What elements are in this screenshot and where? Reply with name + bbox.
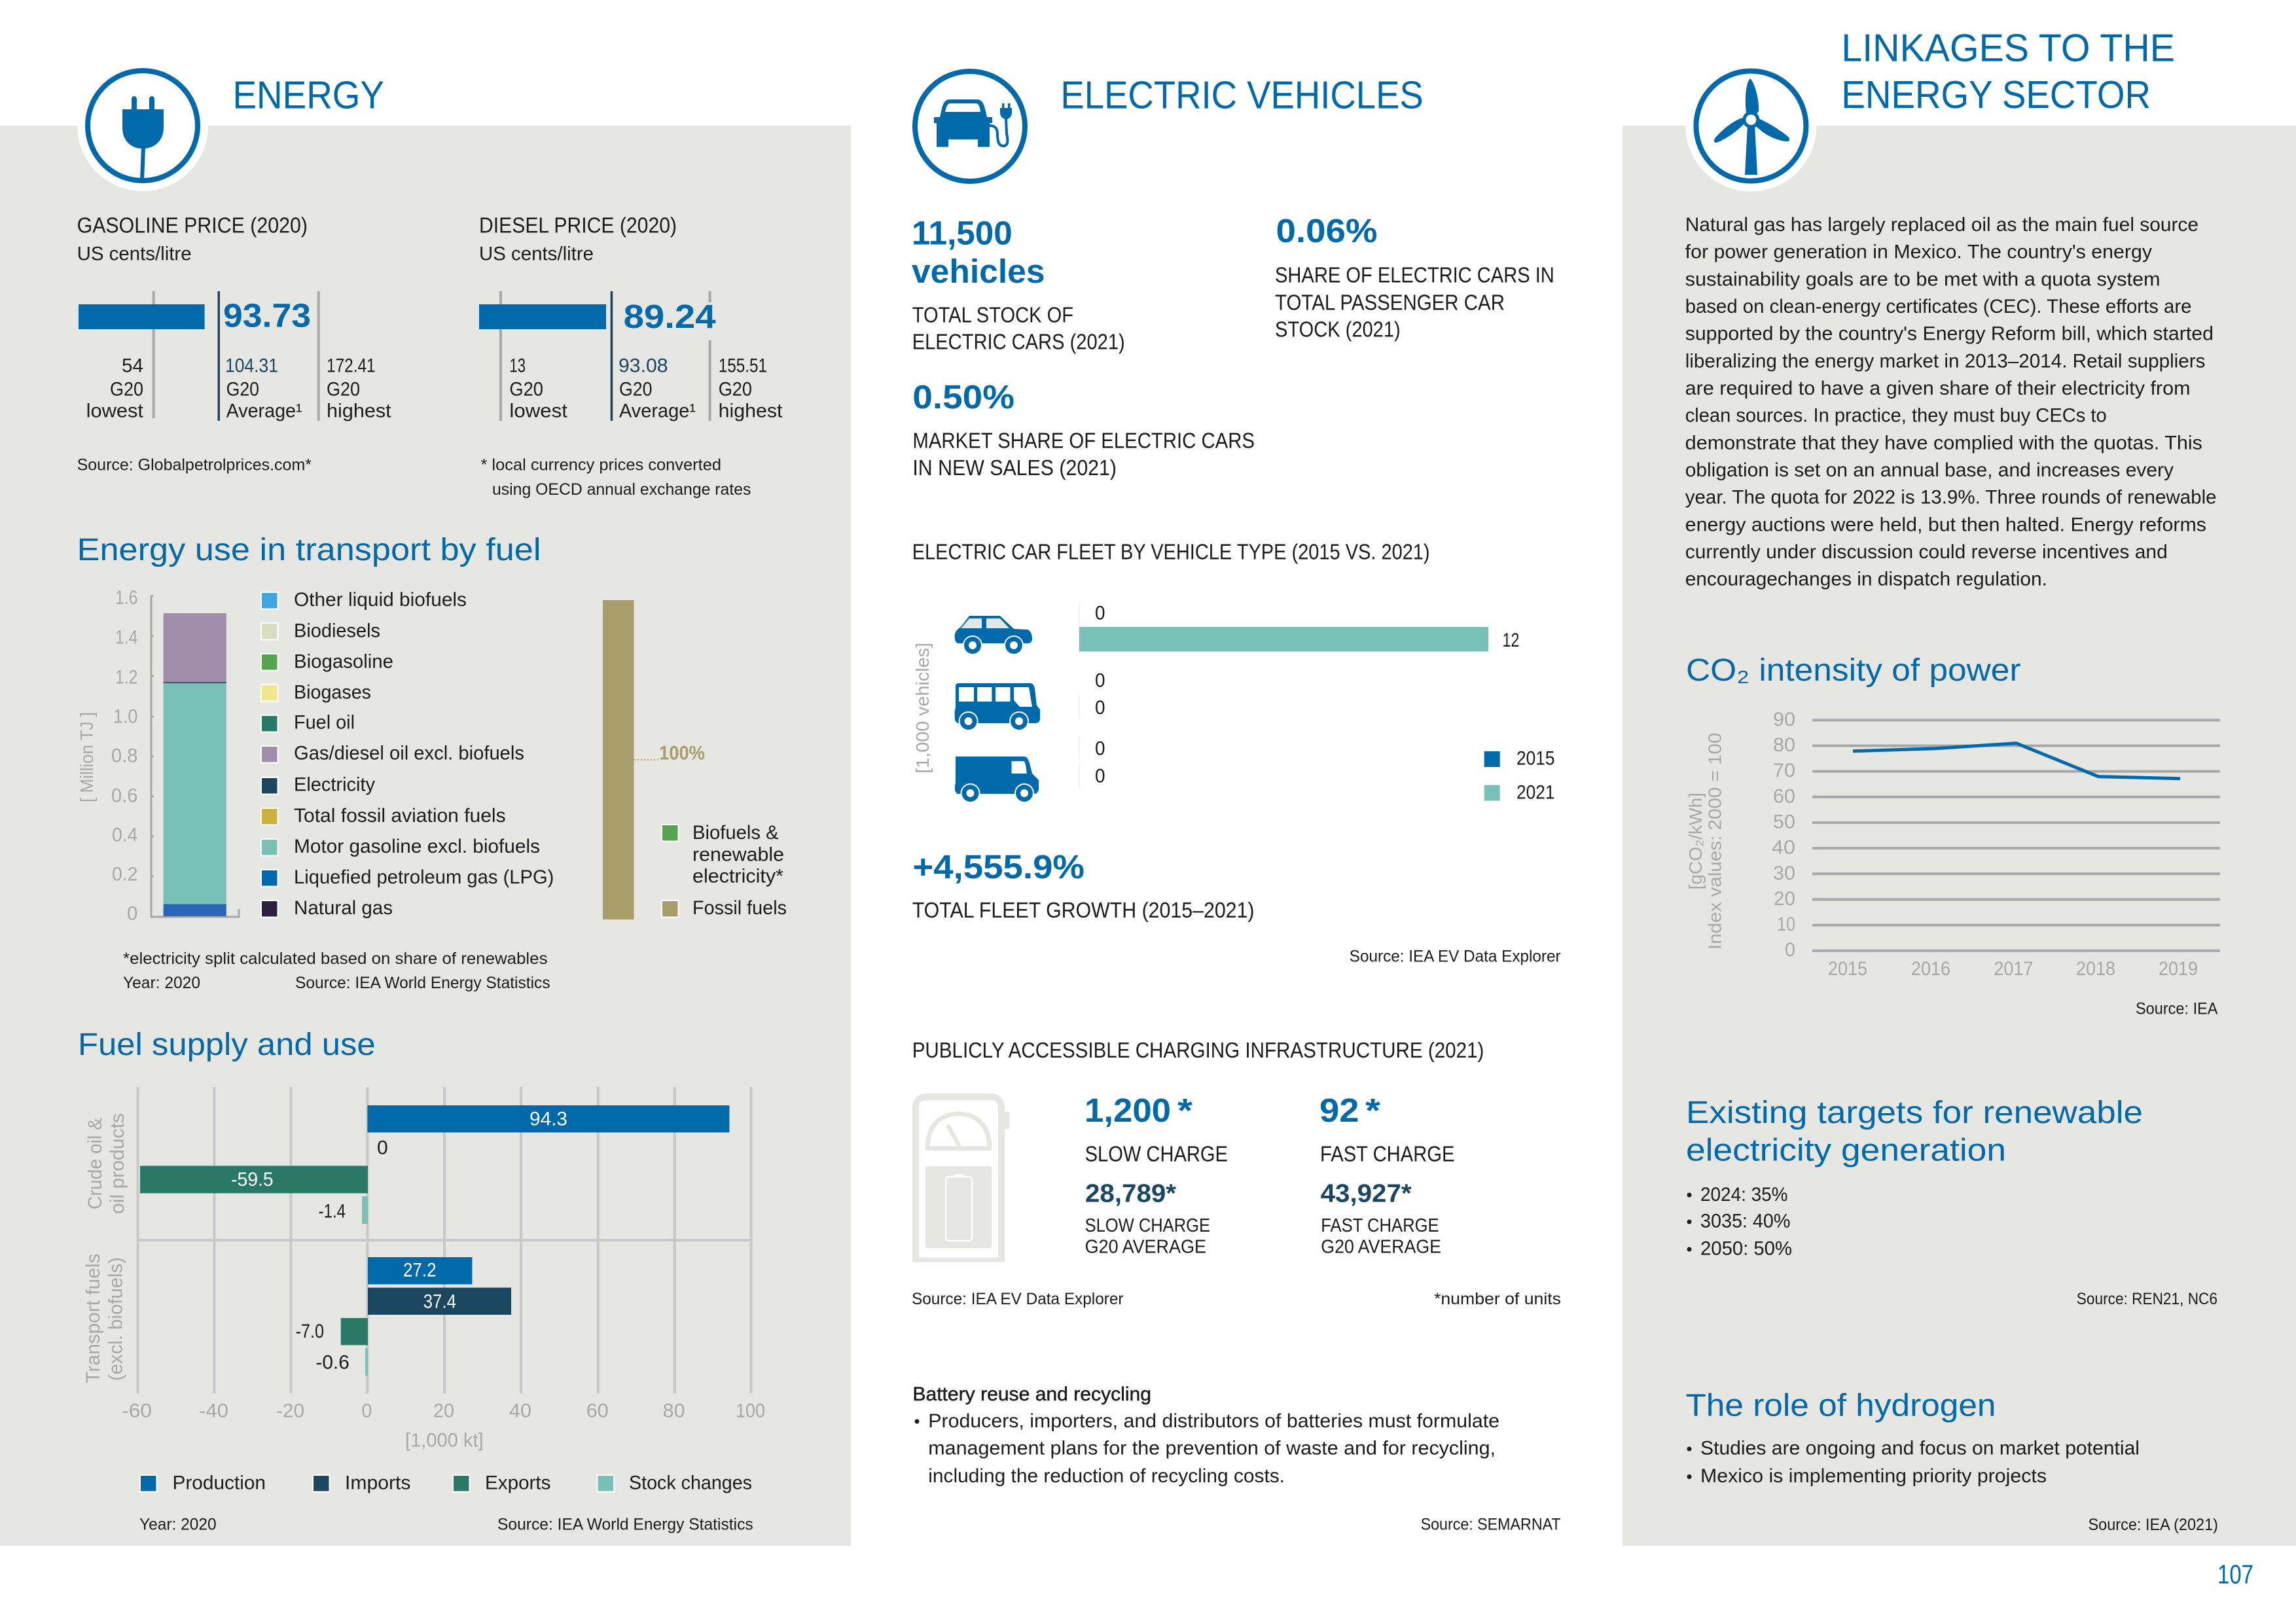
- stacked bar chart: transport fuel: 0.6: [111, 785, 137, 806]
- icon: car: [955, 616, 1032, 655]
- stat: total stock: TOTAL STOCK OF: [912, 302, 1073, 327]
- stacked bar chart: transport fuel: 0.4: [112, 825, 137, 846]
- text block: natural gas and quotas: year. The quota for 2022 is 13.9%. Three rounds of renewable: [1685, 487, 2217, 508]
- bar chart: fleet by vehicle type: 12: [1503, 630, 1520, 651]
- gasoline price block: G20: [110, 378, 143, 401]
- legend: transport fuels: Biogases: [294, 682, 371, 703]
- stat: total stock: vehicles: [912, 253, 1045, 290]
- transport chart notes: [123, 950, 550, 992]
- heading: fuel supply and use: Fuel supply and use: [78, 1027, 376, 1062]
- text block: natural gas and quotas: for power generation in Mexico. The country's energy: [1685, 241, 2152, 263]
- bar chart: fleet by vehicle type: 0: [1095, 670, 1105, 691]
- heading: energy use in transport: Energy use in transport by fuel: [77, 533, 541, 567]
- diesel price block: 89.24: [624, 298, 716, 335]
- stat: share of passenger stock: TOTAL PASSENGER CAR: [1275, 291, 1505, 314]
- transport chart notes: *electricity split calculated based on share of renewables: [123, 950, 547, 968]
- legend: fuel supply: Imports: [345, 1472, 411, 1493]
- chart: renewable share bar: Biofuels &: [692, 822, 779, 844]
- stat: fast charge: G20 AVERAGE: [1321, 1237, 1441, 1258]
- chart: renewable share bar: electricity*: [692, 865, 783, 887]
- text block: natural gas and quotas: obligation is set on an annual base, and increases every: [1685, 459, 2174, 481]
- text block: natural gas and quotas: Natural gas has largely replaced oil as the main fuel source: [1685, 214, 2198, 236]
- heading: fleet by vehicle type: ELECTRIC CAR FLEET BY VEHICLE TYPE (2015 VS. 2021): [912, 539, 1430, 563]
- line chart: co2 intensity: 2016: [1911, 958, 1950, 980]
- bar chart: fleet by vehicle type: [1,000 vehicles]: [912, 643, 933, 774]
- price sources: using OECD annual exchange rates: [492, 480, 751, 499]
- source: charging: *number of units: [1434, 1290, 1561, 1308]
- source: fleet: Source: IEA EV Data Explorer: [1350, 948, 1561, 966]
- fuel supply notes: [139, 1516, 753, 1534]
- chart: renewable share bar: 100%: [659, 742, 705, 764]
- source: iea: Source: IEA: [2136, 1000, 2218, 1018]
- gasoline price block: 93.73: [223, 297, 311, 334]
- line chart: co2 intensity: 70: [1773, 760, 1795, 781]
- line chart: co2 intensity: 30: [1773, 863, 1795, 884]
- icon: van: [955, 757, 1039, 803]
- legend: transport fuels: Gas/diesel oil excl. biofuels: [294, 742, 524, 764]
- heading: renewable targets: electricity generation: [1686, 1133, 2006, 1168]
- stat: fast charge: 92: [1319, 1092, 1359, 1129]
- heading: charging infrastructure: PUBLICLY ACCESSIBLE CHARGING INFRASTRUCTURE (2021): [912, 1038, 1484, 1062]
- fuel supply notes: Year: 2020: [139, 1516, 217, 1534]
- legend: transport fuels: Fuel oil: [294, 712, 355, 733]
- legend: fuel supply: Stock changes: [629, 1472, 752, 1493]
- text block: battery reuse and recycling: Producers, importers, and distributors of batteries must formulate: [928, 1410, 1499, 1432]
- stat: slow charge: 28,789*: [1085, 1179, 1177, 1208]
- bar chart: fuel supply and use: 0: [361, 1400, 372, 1421]
- list: renewable targets: 2024: 35%: [1700, 1184, 1788, 1205]
- list: hydrogen: [1687, 1437, 2140, 1487]
- heading: linkages: ENERGY SECTOR: [1841, 73, 2151, 116]
- legend: fuel supply: [140, 1472, 752, 1493]
- stat: total stock: [912, 215, 1125, 353]
- gasoline price block: GASOLINE PRICE (2020): [77, 213, 308, 237]
- stat: market share: 0.50%: [912, 378, 1014, 416]
- diesel price block: G20: [719, 378, 752, 401]
- bar chart: fuel supply and use: -20: [276, 1400, 304, 1421]
- text block: battery reuse and recycling: [912, 1383, 1499, 1487]
- source: ren21: Source: REN21, NC6: [2077, 1290, 2217, 1308]
- text block: natural gas and quotas: based on clean-energy certificates (CEC). These efforts are: [1685, 296, 2191, 317]
- source: charging: Source: IEA EV Data Explorer: [912, 1290, 1123, 1308]
- bar chart: fuel supply and use: Transport fuels: [82, 1254, 104, 1383]
- icon: plug: [77, 60, 208, 191]
- bar chart: fuel supply and use: 60: [586, 1400, 609, 1421]
- line chart: co2 intensity: 20: [1774, 888, 1795, 910]
- line chart: co2 intensity: 0: [1785, 939, 1795, 961]
- diesel price block: G20: [619, 378, 652, 401]
- text block: natural gas and quotas: sustainability goals are to be met with a quota system: [1685, 268, 2161, 290]
- stat: share of passenger stock: SHARE OF ELECTRIC CARS IN: [1275, 263, 1554, 287]
- bar chart: fleet by vehicle type: 0: [1095, 766, 1105, 787]
- stat: market share: IN NEW SALES (2021): [912, 455, 1117, 480]
- stat: total stock: ELECTRIC CARS (2021): [912, 330, 1125, 353]
- bar chart: fleet by vehicle type: 0: [1095, 697, 1105, 719]
- source: iea 2021: Source: IEA (2021): [2088, 1516, 2218, 1534]
- stat: slow charge: G20 AVERAGE: [1085, 1237, 1206, 1258]
- diesel price block: G20: [509, 378, 543, 401]
- stat: share of passenger stock: 0.06%: [1276, 212, 1377, 249]
- transport chart notes: Source: IEA World Energy Statistics: [295, 974, 550, 992]
- list: renewable targets: 2050: 50%: [1700, 1238, 1792, 1259]
- stat: slow charge: 1,200: [1085, 1092, 1171, 1129]
- bar chart: fuel supply and use: 0: [377, 1137, 388, 1158]
- bar chart: fuel supply and use: Crude oil &: [84, 1118, 106, 1209]
- legend: transport fuels: Other liquid biofuels: [294, 589, 467, 611]
- stat: fleet growth: TOTAL FLEET GROWTH (2015–2021): [912, 898, 1254, 922]
- bar chart: fuel supply and use: -0.6: [315, 1352, 350, 1373]
- text block: natural gas and quotas: supported by the country's Energy Reform bill, which started: [1685, 323, 2214, 345]
- diesel price block: Average¹: [619, 401, 696, 421]
- icon: electric car: [915, 71, 1025, 181]
- text block: battery reuse and recycling: Battery reuse and recycling: [912, 1383, 1151, 1405]
- gasoline price block: lowest: [86, 401, 144, 421]
- text block: natural gas and quotas: energy auctions were held, but then halted. Energy reforms: [1685, 514, 2206, 535]
- stat: slow charge: *: [1177, 1092, 1193, 1129]
- line chart: co2 intensity: [1685, 709, 2220, 980]
- text block: natural gas and quotas: liberalizing the energy market in 2013–2014. Retail suppliers: [1685, 350, 2206, 372]
- diesel price block: US cents/litre: [479, 243, 594, 264]
- diesel price block: 13: [509, 355, 526, 377]
- stacked bar chart: transport fuel: 0: [127, 903, 137, 924]
- price sources: Source: Globalpetrolprices.com*: [77, 455, 312, 474]
- line chart: co2 intensity: 2018: [2076, 958, 2115, 980]
- bar chart: fuel supply and use: [82, 1087, 765, 1452]
- bar chart: fuel supply and use: 40: [509, 1400, 531, 1421]
- stat: share of passenger stock: [1275, 212, 1554, 341]
- price sources: * local currency prices converted: [480, 455, 721, 474]
- text block: natural gas and quotas: are required to have a given share of their electricity from: [1685, 378, 2190, 399]
- stat: fast charge: FAST CHARGE: [1321, 1215, 1439, 1236]
- stat: slow charge: SLOW CHARGE: [1085, 1141, 1228, 1166]
- source: charging: [912, 1290, 1561, 1308]
- stat: fast charge: 43,927*: [1321, 1179, 1412, 1208]
- transport chart notes: Year: 2020: [123, 974, 200, 992]
- stat: total stock: 11,500: [912, 215, 1013, 251]
- icon: charging station: [912, 1097, 1009, 1262]
- line chart: co2 intensity: 90: [1773, 709, 1795, 730]
- line chart: co2 intensity: 60: [1773, 785, 1795, 807]
- text block: natural gas and quotas: currently under discussion could reverse incentives and: [1685, 541, 2168, 563]
- diesel price block: highest: [719, 401, 783, 421]
- stat: fast charge: FAST CHARGE: [1320, 1141, 1454, 1166]
- gasoline price block: US cents/litre: [77, 243, 192, 264]
- price sources: [77, 455, 751, 499]
- bar chart: fuel supply and use: -59.5: [231, 1169, 274, 1190]
- legend: transport fuels: Electricity: [294, 774, 375, 796]
- heading: linkages: [1841, 26, 2175, 116]
- stacked bar chart: transport fuel: 1.0: [113, 705, 137, 728]
- stacked bar chart: transport fuel: 0.2: [112, 864, 137, 885]
- bar chart: fleet by vehicle type: 0: [1095, 602, 1105, 624]
- bar chart: fuel supply and use: -1.4: [319, 1200, 346, 1222]
- stat: slow charge: SLOW CHARGE: [1085, 1215, 1210, 1236]
- bar chart: fuel supply and use: -60: [122, 1400, 152, 1421]
- gasoline price block: 172.41: [327, 355, 376, 377]
- fuel supply notes: Source: IEA World Energy Statistics: [497, 1516, 753, 1534]
- stat: fleet growth: +4,555.9%: [912, 848, 1085, 885]
- heading: electric vehicles: ELECTRIC VEHICLES: [1060, 73, 1424, 116]
- chart: renewable share bar: Fossil fuels: [692, 897, 787, 919]
- chart: renewable share bar: [603, 600, 787, 919]
- bar chart: fuel supply and use: 37.4: [423, 1291, 456, 1312]
- bar chart: fuel supply and use: 20: [433, 1400, 454, 1421]
- gasoline price block: 104.31: [225, 355, 278, 377]
- heading: linkages: LINKAGES TO THE: [1841, 26, 2175, 69]
- panel: linkages to the energy sector: [1623, 26, 2296, 1546]
- bar chart: fleet by vehicle type: 0: [1095, 738, 1105, 759]
- line chart: co2 intensity: 2017: [1994, 958, 2033, 980]
- gasoline price block: G20: [226, 378, 259, 401]
- line chart: co2 intensity: 80: [1773, 734, 1795, 756]
- legend: transport fuels: Total fossil aviation fuels: [294, 805, 506, 827]
- text block: battery reuse and recycling: management plans for the prevention of waste and for recycling,: [928, 1437, 1496, 1459]
- text block: battery reuse and recycling: including the reduction of recycling costs.: [928, 1465, 1285, 1487]
- line chart: co2 intensity: 2015: [1828, 958, 1867, 980]
- stat: share of passenger stock: STOCK (2021): [1275, 317, 1401, 341]
- line chart: co2 intensity: 50: [1773, 812, 1795, 832]
- legend: fuel supply: Production: [173, 1472, 266, 1493]
- bar chart: fuel supply and use: -7.0: [296, 1321, 324, 1342]
- heading: renewable targets: Existing targets for renewable: [1686, 1096, 2143, 1130]
- text block: natural gas and quotas: clean sources. In practice, they must buy CECs to: [1685, 405, 2107, 427]
- stat: fast charge: [1319, 1092, 1454, 1258]
- bar chart: fleet by vehicle type: 2015: [1516, 747, 1555, 770]
- bar chart: fuel supply and use: (excl. biofuels): [105, 1257, 127, 1381]
- legend: transport fuels: [261, 589, 554, 919]
- line chart: co2 intensity: [gCO₂/kWh]: [1685, 793, 1706, 889]
- stat: fleet growth: [912, 848, 1254, 922]
- gasoline price block: G20: [327, 378, 360, 401]
- legend: transport fuels: Biogasoline: [294, 651, 393, 673]
- stacked bar chart: transport fuel: 1.4: [115, 627, 137, 648]
- stacked bar chart: transport fuel: [77, 587, 239, 924]
- stat: market share: MARKET SHARE OF ELECTRIC CARS: [912, 428, 1255, 453]
- bar chart: fuel supply and use: 94.3: [529, 1109, 567, 1130]
- bar chart: fuel supply and use: 100: [736, 1400, 765, 1421]
- legend: transport fuels: Motor gasoline excl. biofuels: [294, 836, 540, 857]
- icon: wind turbine: [1685, 60, 1816, 191]
- legend: fuel supply: Exports: [485, 1472, 551, 1493]
- gasoline price block: highest: [327, 401, 391, 421]
- heading: renewable targets: [1686, 1096, 2143, 1168]
- panel: energy: [0, 60, 851, 1546]
- line chart: co2 intensity: 2019: [2159, 958, 2198, 980]
- stacked bar chart: transport fuel: 1.2: [115, 666, 137, 688]
- gasoline price block: 54: [122, 355, 143, 377]
- heading: co2 intensity: CO₂ intensity of power: [1686, 653, 2021, 688]
- stacked bar chart: transport fuel: [ Million TJ ]: [77, 712, 97, 802]
- list: renewable targets: [1687, 1184, 1792, 1259]
- heading: role of hydrogen: The role of hydrogen: [1685, 1389, 1996, 1423]
- diesel price block: 155.51: [719, 355, 767, 377]
- line chart: co2 intensity: Index values: 2000 = 100: [1704, 733, 1725, 950]
- gasoline price block: [77, 213, 391, 421]
- text block: natural gas and quotas: demonstrate that they have complied with the quotas. This: [1685, 432, 2202, 454]
- list: hydrogen: Studies are ongoing and focus on market potential: [1700, 1437, 2140, 1459]
- source: semarnat: Source: SEMARNAT: [1421, 1516, 1561, 1534]
- bar chart: fuel supply and use: [1,000 kt]: [405, 1429, 484, 1452]
- panel: electric vehicles: [912, 71, 1561, 1534]
- bar chart: fleet by vehicle type: [912, 602, 1555, 804]
- text block: natural gas and quotas: [1685, 214, 2217, 590]
- chart: renewable share bar: renewable: [692, 844, 784, 865]
- legend: transport fuels: Biodiesels: [294, 620, 380, 641]
- bar chart: fuel supply and use: 80: [663, 1400, 685, 1421]
- diesel price block: [479, 213, 783, 421]
- bar chart: fuel supply and use: 27.2: [403, 1259, 436, 1281]
- stacked bar chart: transport fuel: 0.8: [111, 745, 137, 767]
- legend: transport fuels: Natural gas: [294, 897, 393, 919]
- icon: bus: [955, 683, 1040, 731]
- list: hydrogen: Mexico is implementing priority projects: [1700, 1465, 2047, 1487]
- legend: transport fuels: Liquefied petroleum gas (LPG): [294, 866, 554, 888]
- stacked bar chart: transport fuel: 1.6: [115, 587, 137, 609]
- list: renewable targets: 3035: 40%: [1700, 1211, 1790, 1232]
- page number: 107: [2217, 1559, 2253, 1589]
- text block: natural gas and quotas: encouragechanges in dispatch regulation.: [1685, 568, 2047, 590]
- stat: market share: [912, 378, 1255, 480]
- line chart: co2 intensity: 40: [1772, 837, 1795, 859]
- stat: slow charge: [1085, 1092, 1228, 1258]
- diesel price block: 93.08: [619, 355, 668, 377]
- line chart: co2 intensity: 10: [1777, 914, 1795, 935]
- gasoline price block: Average¹: [226, 401, 302, 421]
- bar chart: fuel supply and use: oil products: [107, 1113, 128, 1214]
- stat: fast charge: *: [1365, 1092, 1380, 1129]
- diesel price block: lowest: [509, 401, 568, 421]
- bar chart: fuel supply and use: -40: [199, 1400, 228, 1421]
- diesel price block: DIESEL PRICE (2020): [479, 213, 677, 237]
- bar chart: fleet by vehicle type: 2021: [1516, 781, 1555, 804]
- heading: energy: ENERGY: [233, 73, 384, 116]
